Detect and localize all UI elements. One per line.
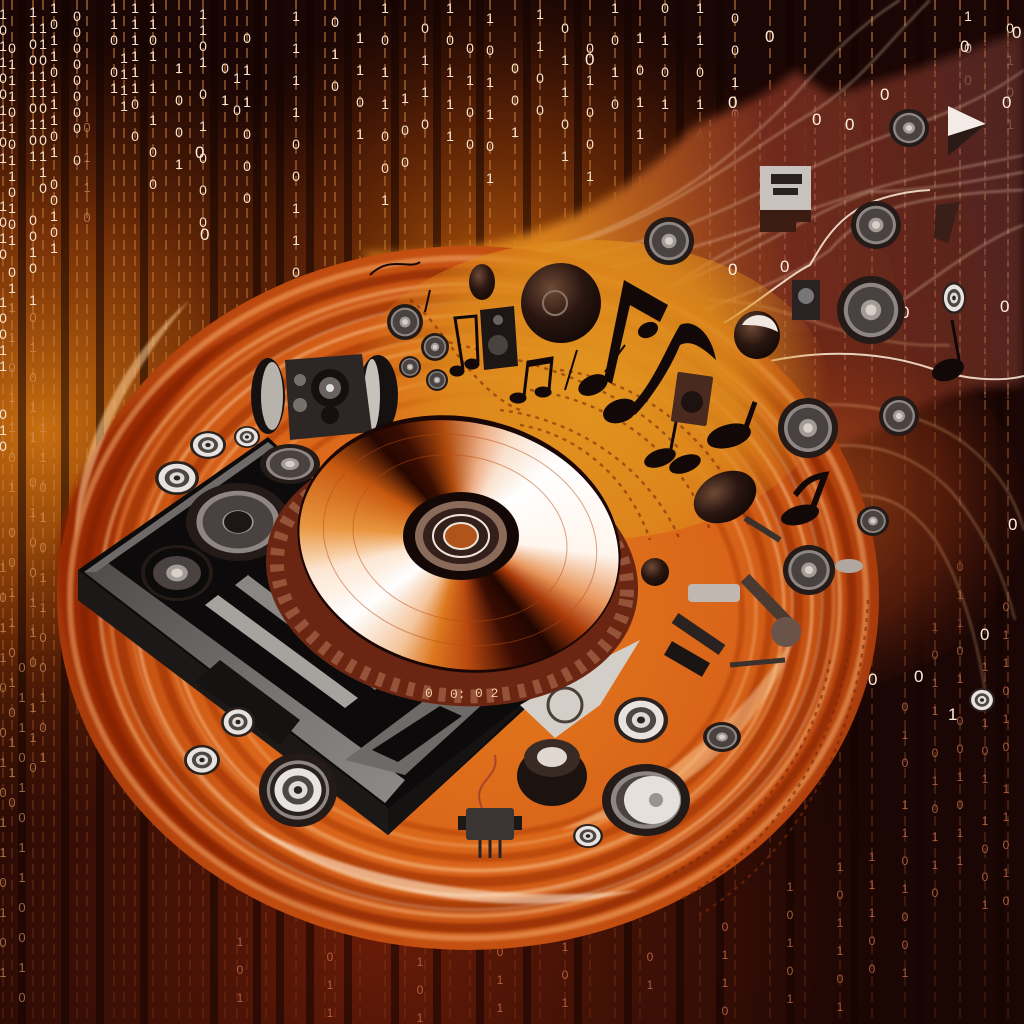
digits on disc edge: 0: <box>450 687 466 702</box>
scattered binary digits on the tail: 0 <box>195 143 204 162</box>
connector component <box>458 755 522 858</box>
scattered binary digits on the tail: 0 <box>960 37 969 56</box>
lower binary rain <box>233 560 1013 1024</box>
binary rain columns: 1100110101 0010 1 <box>25 4 41 308</box>
camera-like audio module <box>251 354 398 440</box>
lower binary rain: 0 1 0 1 1 0 1 0 0 1 <box>898 700 912 980</box>
scattered binary digits on the tail: 0 <box>1002 93 1011 112</box>
note: right lower <box>779 475 825 529</box>
wave tail flowing to top right <box>360 0 1024 690</box>
binary rain columns: 1101 0 1 0 0 0 <box>195 6 211 230</box>
binary rain columns: 1 0 <box>229 70 245 118</box>
music notes <box>370 262 966 529</box>
frame lower-left rail <box>84 560 405 803</box>
vinyl disc <box>249 386 655 730</box>
binary rain columns: 0 1 0 1 <box>657 0 673 112</box>
note: upper left beamed <box>450 316 479 376</box>
orange swirl <box>57 240 879 950</box>
floppy-like device <box>760 166 811 232</box>
play icon <box>948 106 986 156</box>
scattered binary digits on the tail: 0 <box>880 85 889 104</box>
binary rain columns: 1 0 1 0 <box>607 0 623 112</box>
lower binary rain: 0 1 1 0 1 0 1 1 0 1 0 <box>999 600 1013 908</box>
digits on disc edge: 0 2 <box>475 686 498 701</box>
disc surface <box>276 391 642 699</box>
scattered binary digits on the tail: 0 <box>585 50 594 69</box>
binary rain columns: 1 0 1 1 0 0 1 <box>377 0 393 208</box>
binary rain columns: 1 0 1 1 0 1 <box>482 10 498 186</box>
small speaker stack <box>480 306 518 370</box>
binary rain columns: 1 1 0 1 0 0 0 1 1 <box>692 0 708 272</box>
lower binary rain: 1 0 1 <box>413 955 427 1024</box>
binary rain columns: 1111 <box>116 50 132 114</box>
binary rain columns: 0 0 1 <box>507 60 523 140</box>
note: beamed mid <box>510 358 552 403</box>
note: thin squiggle <box>370 262 625 390</box>
binary rain columns: 0 1 0 <box>327 14 343 94</box>
lower binary rain: 1 0 1 0 1 <box>783 880 797 1006</box>
binary rain columns: 1 0 1 1 <box>632 30 648 142</box>
binary rain columns: 00000000 0 <box>69 8 85 168</box>
binary rain columns: 110 01 <box>106 0 122 96</box>
scattered binary digits on the tail: 0 <box>1000 297 1009 316</box>
binary rain columns: 11011010110 <box>35 20 51 196</box>
note: small pair <box>642 390 755 477</box>
lower binary rain: 1 0 1 0 1 1 0 0 1 <box>978 660 992 912</box>
binary rain columns: 1101 1 1 0 0 <box>145 0 161 192</box>
floating speakers <box>155 109 995 848</box>
binary rain columns: 0 1 0 0 <box>462 40 478 152</box>
scattered binary digits on the tail: 0 <box>780 257 789 276</box>
shield pick icon <box>934 202 960 243</box>
binary rain columns: 1 0 0 <box>397 90 413 170</box>
scattered binary digits on the tail <box>195 23 1021 724</box>
dim binary rain columns: 0 1 0 1 1 0 1 0 0 1 1 0 1 1 0 <box>26 310 40 775</box>
grain marks on the gold area <box>410 300 868 915</box>
binary rain columns: 1 0 1 1 1 <box>442 0 458 144</box>
scattered binary digits on the tail: 0 <box>765 27 774 46</box>
scattered binary digits on the tail: 0 <box>845 115 854 134</box>
small hardware parts <box>668 518 863 670</box>
scattered binary digits on the tail: 0 <box>1012 23 1021 42</box>
dim binary rain columns <box>0 120 94 1005</box>
binary rain columns: 1 0 0 1 <box>171 60 187 172</box>
player device <box>78 437 640 835</box>
binary rain columns: 0 0 1 0 1 <box>727 10 743 154</box>
binary rain columns: 1 1 0 1 <box>352 30 368 142</box>
binary rain columns: 1111110 0 <box>127 0 143 144</box>
binary rain columns: 1 0 0 <box>960 8 976 88</box>
speaker drivers in the player <box>141 444 320 601</box>
disc edge band <box>249 420 655 730</box>
binary rain columns: 0 1 <box>217 60 233 108</box>
binary rain columns <box>0 0 1018 454</box>
scattered binary digits on the tail: 0 <box>812 110 821 129</box>
binary rain columns: 0111010110101 01 <box>4 40 20 296</box>
binary rain columns: 0 1 1 0 1 <box>557 20 573 164</box>
scattered binary digits on the tail: 0 <box>914 667 923 686</box>
dark ball speakers <box>469 263 780 586</box>
binary rain columns: 0 1 1 0 0 0 <box>239 30 255 206</box>
binary rain columns: 0 1 0 1 <box>1002 20 1018 132</box>
scattered binary digits on the tail: 0 <box>980 625 989 644</box>
scattered binary digits on the tail: 0 <box>1008 515 1017 534</box>
lower binary rain: 1 1 1 0 0 <box>865 850 879 976</box>
note: far right <box>930 320 966 385</box>
note: large curved <box>600 323 716 427</box>
dim binary rain columns: 1 1 0 1 0 1 1 0 0 1 0 1 <box>36 420 50 765</box>
disc centre label <box>403 492 519 580</box>
scattered binary digits on the tail: 0 <box>900 303 909 322</box>
dim binary rain columns: 1 1 0 1 1 0 1 0 0 1 1 0 1 0 1 1 0 <box>4 300 20 810</box>
lower binary rain: 0 1 <box>643 950 657 992</box>
binary rain columns: 0 1 0 0 1 <box>582 40 598 184</box>
binary rain columns: 1011011101 00101 <box>46 0 62 256</box>
drum magnet speaker <box>517 739 587 806</box>
scattered binary digits on the tail: 0 <box>728 260 737 279</box>
binary rain columns: 1 1 0 0 <box>532 6 548 118</box>
scattered binary digits on the tail: 1 <box>948 705 957 724</box>
digits on disc edge <box>425 686 498 702</box>
rectangular box speakers <box>671 280 820 426</box>
note: large beamed <box>576 280 668 399</box>
scattered binary digits on the tail: 0 <box>728 93 737 112</box>
lower binary rain: 1 0 1 1 0 1 0 1 1 0 <box>928 620 942 900</box>
digits on disc edge: 0 <box>425 686 433 701</box>
scattered binary digits on the tail: 0 <box>200 225 209 244</box>
binary rain columns: 0 1 1 0 <box>417 20 433 132</box>
lower binary rain: 0 1 1 0 1 0 0 1 0 1 1 <box>953 560 967 868</box>
binary rain columns: 1 1 1 1 0 0 1 1 0 0 0 <box>288 8 304 344</box>
dim binary rain columns: 0 1 1 0 <box>80 120 94 225</box>
dim binary rain columns: 0 1 1 0 1 0 1 1 0 0 1 0 <box>14 660 30 1005</box>
scattered binary digits on the tail: 0 <box>868 670 877 689</box>
